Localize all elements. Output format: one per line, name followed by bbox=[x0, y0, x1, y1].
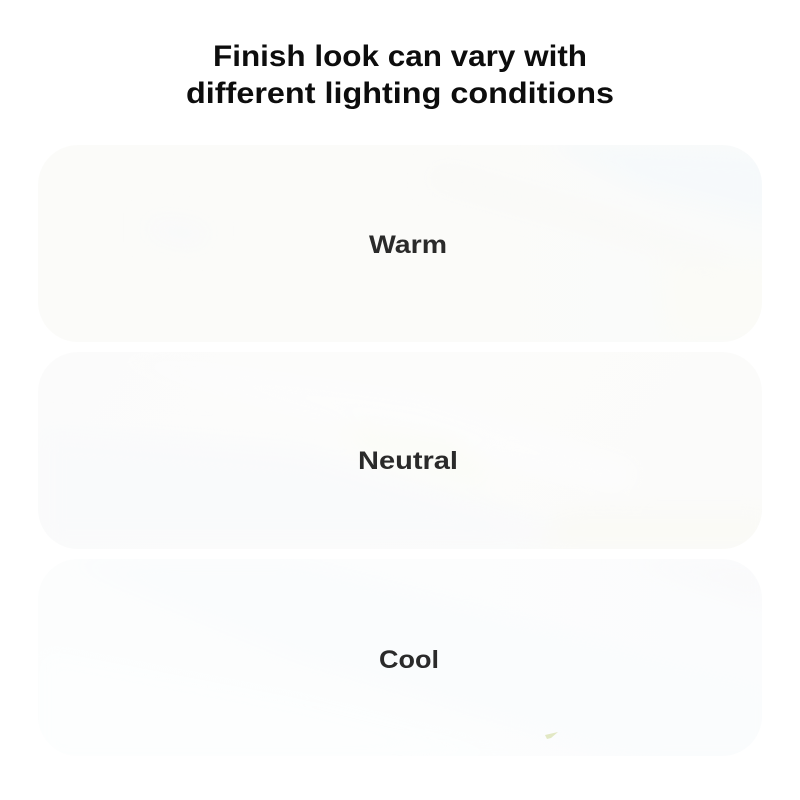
panel: warm bbox=[369, 154, 762, 253]
title bbox=[186, 40, 614, 110]
label: cool: Cool bbox=[379, 646, 439, 674]
panel: cool bbox=[380, 650, 558, 739]
panel: neutral bbox=[360, 451, 757, 540]
icon: small speck bbox=[545, 732, 558, 739]
title: Finish look can vary with bbox=[213, 40, 587, 73]
title: different lighting conditions bbox=[186, 77, 614, 110]
label: warm: Warm bbox=[369, 231, 447, 259]
label: neutral: Neutral bbox=[358, 447, 458, 475]
